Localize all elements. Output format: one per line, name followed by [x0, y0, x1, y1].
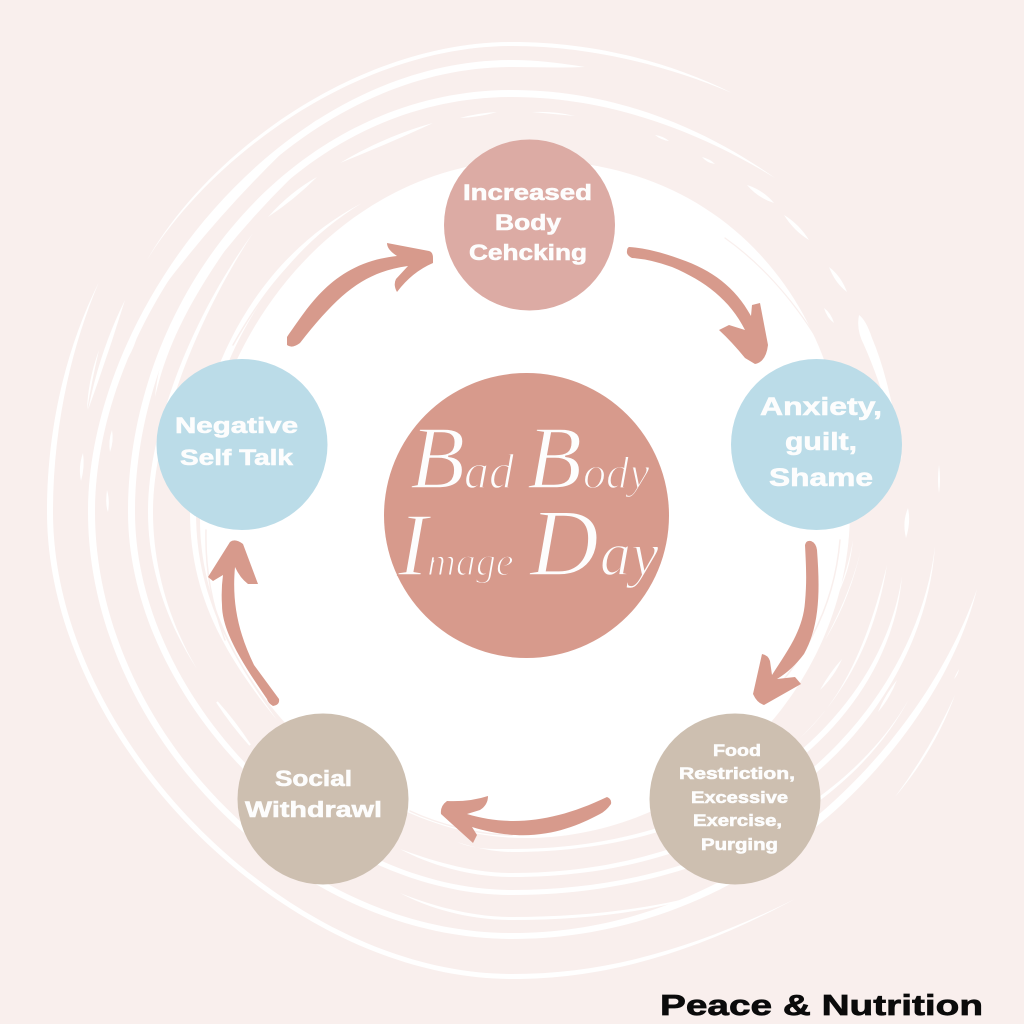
node: social withdrawal: Withdrawl [245, 797, 382, 822]
center circle with title: I [397, 496, 432, 595]
center circle with title: ay [600, 521, 659, 589]
pale brush streaks on disc edge [206, 238, 840, 835]
center circle with title [384, 373, 669, 658]
node: anxiety guilt shame [731, 359, 902, 530]
node: anxiety guilt shame: Shame [769, 464, 873, 492]
center circle with title: B [410, 409, 465, 508]
arrow: anxiety to food restriction [753, 541, 819, 705]
brand footer: Peace & Nutrition [660, 990, 983, 1022]
arrow: negative self talk to body checking [287, 243, 433, 347]
center circle with title: ad [464, 443, 515, 499]
arrow: body checking to anxiety [627, 247, 768, 364]
central white disc [200, 160, 850, 838]
node: food restriction excessive exercise purging: Excessive [691, 788, 788, 807]
center circle with title: B [527, 409, 582, 508]
node: social withdrawal [238, 714, 408, 884]
node: food restriction excessive exercise purging [650, 714, 820, 884]
node: food restriction excessive exercise purging: Exercise, [693, 811, 782, 830]
center circle with title: ody [583, 447, 650, 498]
center circle with title: D [528, 490, 599, 596]
node: negative self talk [156, 359, 328, 530]
node: food restriction excessive exercise purging: Food [713, 741, 761, 760]
node: food restriction excessive exercise purging: Restriction, [679, 764, 795, 783]
brush ring short streaks [80, 112, 959, 797]
node: negative self talk: Negative [175, 413, 298, 438]
arrow: food restriction to social withdrawal [441, 796, 611, 843]
node: food restriction excessive exercise purging: Purging [701, 835, 778, 854]
node: increased body checking: Increased [463, 180, 592, 205]
arrow: social withdrawal to negative self talk [208, 540, 279, 706]
node: anxiety guilt shame: Anxiety, [760, 393, 882, 421]
node: anxiety guilt shame: guilt, [785, 428, 857, 456]
center circle with title: mage [427, 539, 514, 584]
node: increased body checking: Cehcking [469, 240, 587, 265]
node: increased body checking [444, 140, 615, 310]
node: social withdrawal: Social [275, 766, 352, 791]
node: negative self talk: Self Talk [180, 445, 294, 470]
node: increased body checking: Body [495, 210, 562, 235]
